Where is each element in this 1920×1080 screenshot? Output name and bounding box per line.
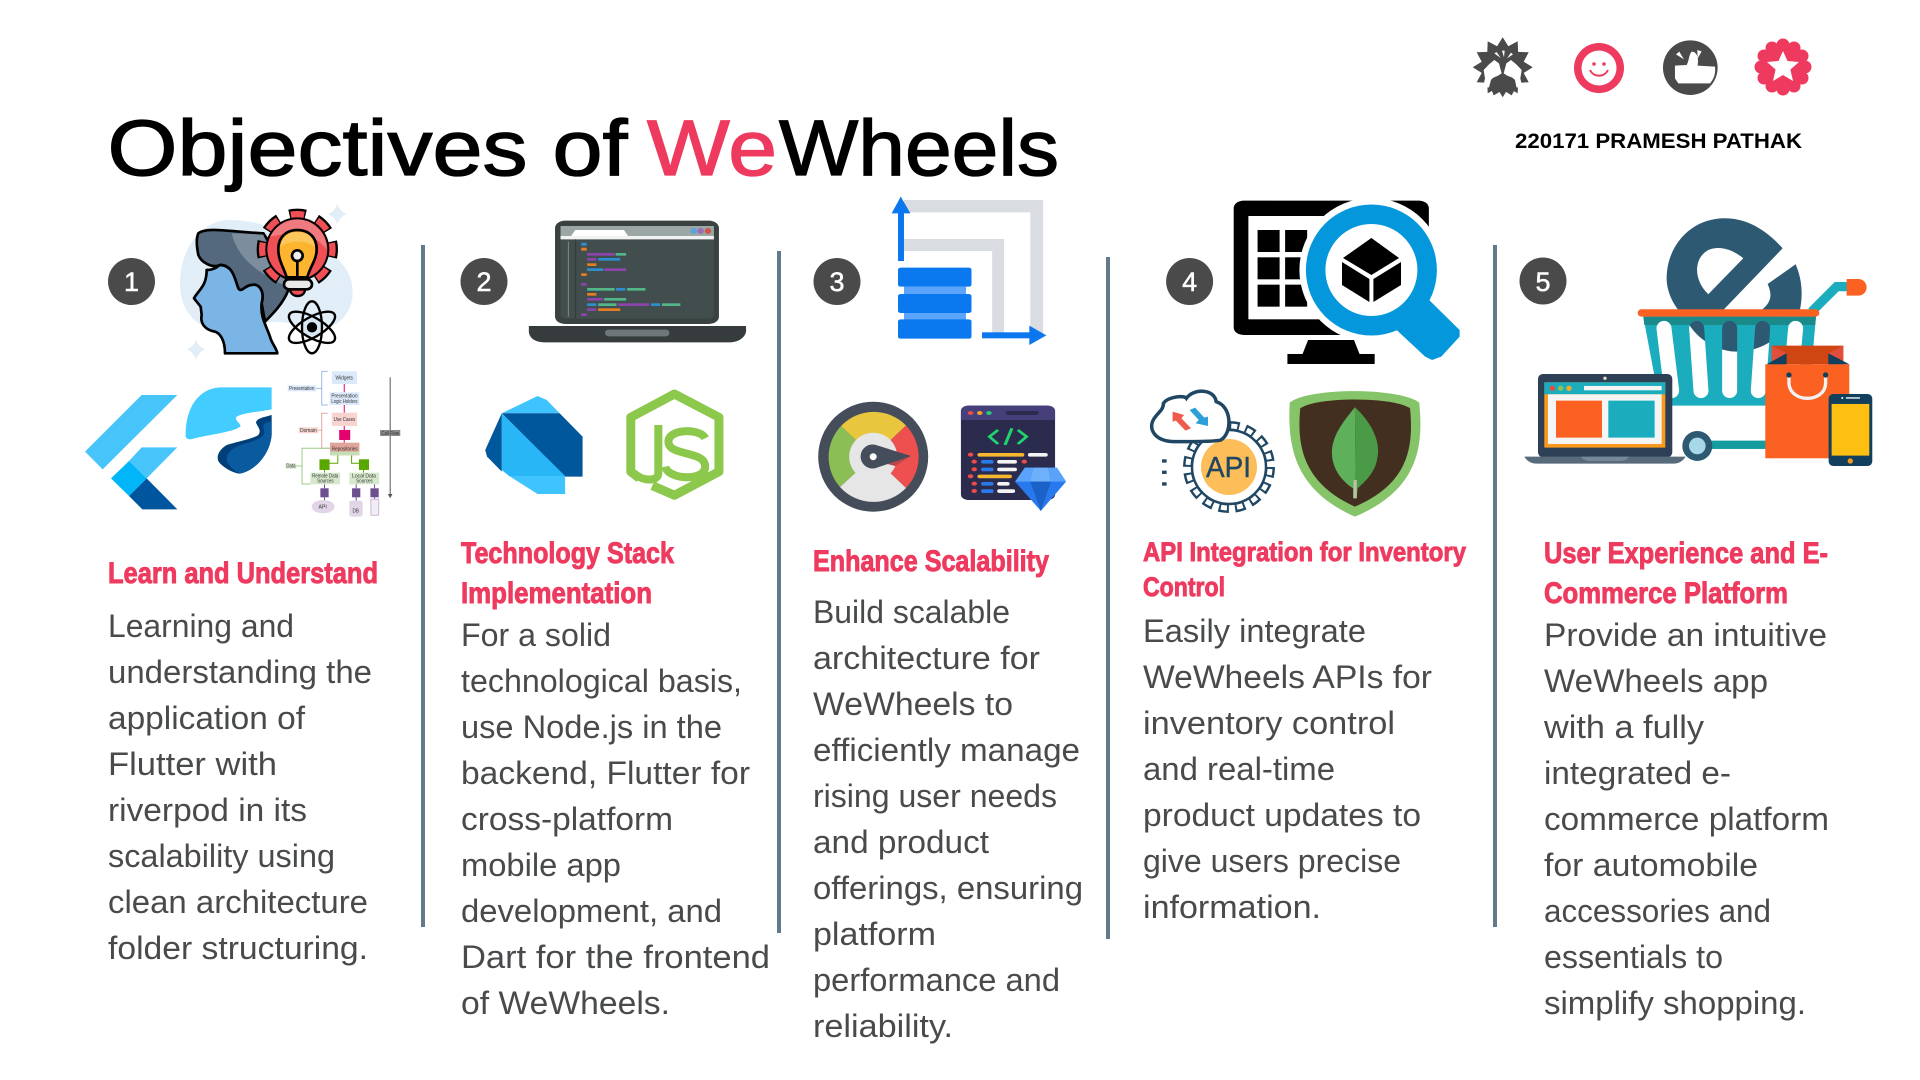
title xyxy=(108,103,1059,192)
body text: efficiently manage xyxy=(813,732,1080,768)
body text: clean architecture xyxy=(108,884,368,920)
body text: give users precise xyxy=(1143,843,1401,879)
body text: with a fully xyxy=(1543,709,1704,745)
body text xyxy=(1143,613,1432,925)
number badge 4: 4 xyxy=(1182,267,1197,297)
panel: technology stack implementation xyxy=(460,221,770,1021)
diagram: clean architecture flow: Data xyxy=(286,463,296,469)
icon: star badge xyxy=(1754,38,1812,96)
body text: performance and xyxy=(813,962,1060,998)
body text: scalability using xyxy=(108,838,335,874)
body text xyxy=(1543,617,1829,1021)
body text: offerings, ensuring xyxy=(813,870,1083,906)
heading: Technology Stack xyxy=(461,537,674,570)
diagram: clean architecture flow: Local Data xyxy=(352,473,376,479)
body text: WeWheels app xyxy=(1544,663,1768,699)
body text: essentials to xyxy=(1544,939,1723,975)
body text: Build scalable xyxy=(813,594,1010,630)
logo: riverpod xyxy=(186,387,272,474)
body text: and real-time xyxy=(1143,751,1335,787)
body text: Provide an intuitive xyxy=(1544,617,1827,653)
heading: API Integration for Inventory xyxy=(1143,537,1466,567)
heading: Control xyxy=(1143,572,1225,602)
number badge 4 xyxy=(1166,258,1213,305)
icon: burst with hands xyxy=(1473,37,1533,97)
divider 2 xyxy=(777,251,781,933)
number badge 2: 2 xyxy=(476,267,492,297)
panel: learn and understand xyxy=(85,204,400,966)
number badge 1: 1 xyxy=(124,267,139,297)
body text: and product xyxy=(813,824,989,860)
body text xyxy=(108,608,372,966)
body text: accessories and xyxy=(1544,893,1771,929)
diagram: clean architecture flow: Logic Holders xyxy=(331,399,358,405)
body text: mobile app xyxy=(461,847,621,883)
panel: api integration xyxy=(1143,198,1466,925)
icon: laptop with code xyxy=(529,221,746,342)
diagram: clean architecture flow: API xyxy=(319,504,327,510)
heading xyxy=(1544,537,1828,610)
body text: integrated e- xyxy=(1544,755,1731,791)
heading xyxy=(461,537,674,610)
body text: of WeWheels. xyxy=(461,985,670,1021)
body text: folder structuring. xyxy=(108,930,368,966)
icon: thumbs up xyxy=(1663,40,1718,95)
body text: development, and xyxy=(461,893,722,929)
heading: Learn and Understand xyxy=(108,557,378,590)
number badge 1 xyxy=(108,258,155,305)
panel: enhance scalability xyxy=(813,197,1083,1044)
diagram: clean architecture flow xyxy=(285,371,400,517)
body text: use Node.js in the xyxy=(461,709,722,745)
icon: monitor with magnifier xyxy=(1234,198,1460,364)
body text: architecture for xyxy=(813,640,1040,676)
diagram: clean architecture flow: Presentation xyxy=(331,393,358,399)
diagram: clean architecture flow: Use Cases xyxy=(334,417,356,423)
body text: Easily integrate xyxy=(1143,613,1366,649)
title: Objectives of xyxy=(108,103,629,192)
body text: technological basis, xyxy=(461,663,742,699)
body text: cross-platform xyxy=(461,801,673,837)
heading: Commerce Platform xyxy=(1544,577,1788,610)
logo: node.js xyxy=(631,394,719,495)
heading: Implementation xyxy=(461,577,652,610)
body text: rising user needs xyxy=(813,778,1057,814)
body text: product updates to xyxy=(1143,797,1421,833)
heading: User Experience and E- xyxy=(1544,537,1828,570)
number badge 5: 5 xyxy=(1535,267,1551,297)
body text: WeWheels APIs for xyxy=(1143,659,1432,695)
panel: user experience and e-commerce xyxy=(1520,218,1872,1021)
divider 4 xyxy=(1493,245,1497,927)
heading xyxy=(1143,537,1466,602)
logo: flutter xyxy=(85,395,177,509)
diagram: clean architecture flow: Repositories xyxy=(332,446,358,452)
diagram: clean architecture flow: Remote Data xyxy=(312,473,338,479)
diagram: clean architecture flow: DB xyxy=(353,508,359,514)
body text: backend, Flutter for xyxy=(461,755,750,791)
logo: mongodb xyxy=(1289,391,1420,517)
heading: Enhance Scalability xyxy=(813,545,1049,578)
diagram: clean architecture flow: Widgets xyxy=(336,375,353,381)
body text: information. xyxy=(1143,889,1321,925)
logo: dart xyxy=(485,396,583,494)
icon: code window with gem xyxy=(961,406,1066,511)
body text xyxy=(813,594,1083,1044)
number badge 3: 3 xyxy=(829,267,845,297)
body text: Flutter with xyxy=(108,746,277,782)
diagram: clean architecture flow: Call Flow xyxy=(381,431,399,437)
icon: cloud api gear xyxy=(1152,391,1270,508)
icon: speed gauge xyxy=(818,402,928,512)
number badge 2 xyxy=(460,258,508,305)
icon: head with idea gear and atom xyxy=(180,204,353,359)
icon: database scaling arrows xyxy=(892,197,1046,345)
body text: for automobile xyxy=(1544,847,1758,883)
body text: Dart for the frontend xyxy=(461,939,770,975)
body text: riverpod in its xyxy=(108,792,307,828)
body text: WeWheels to xyxy=(813,686,1013,722)
diagram: clean architecture flow: Domain xyxy=(300,428,317,434)
body text: Learning and xyxy=(108,608,294,644)
number badge 5 xyxy=(1520,258,1566,304)
body text: inventory control xyxy=(1143,705,1395,741)
title: We xyxy=(647,103,777,192)
body text: commerce platform xyxy=(1544,801,1829,837)
body text: For a solid xyxy=(461,617,611,653)
body text: platform xyxy=(813,916,936,952)
diagram: clean architecture flow: Sources xyxy=(317,478,334,484)
body text: application of xyxy=(108,700,305,736)
title: Wheels xyxy=(779,103,1059,192)
body text: simplify shopping. xyxy=(1544,985,1806,1021)
body text: reliability. xyxy=(813,1008,953,1044)
diagram: clean architecture flow: Presentation xyxy=(289,386,315,392)
icon: cloud api gear: API xyxy=(1206,452,1251,484)
divider 3 xyxy=(1106,257,1110,939)
body text: understanding the xyxy=(108,654,372,690)
icon: smiley xyxy=(1574,43,1624,93)
body text xyxy=(461,617,770,1021)
author label: 220171 PRAMESH PATHAK xyxy=(1515,130,1802,153)
number badge 3 xyxy=(814,258,860,305)
divider 1 xyxy=(421,245,425,927)
icon: e-commerce cart, bag, laptop and phone xyxy=(1524,218,1872,466)
diagram: clean architecture flow: Sources xyxy=(356,478,373,484)
